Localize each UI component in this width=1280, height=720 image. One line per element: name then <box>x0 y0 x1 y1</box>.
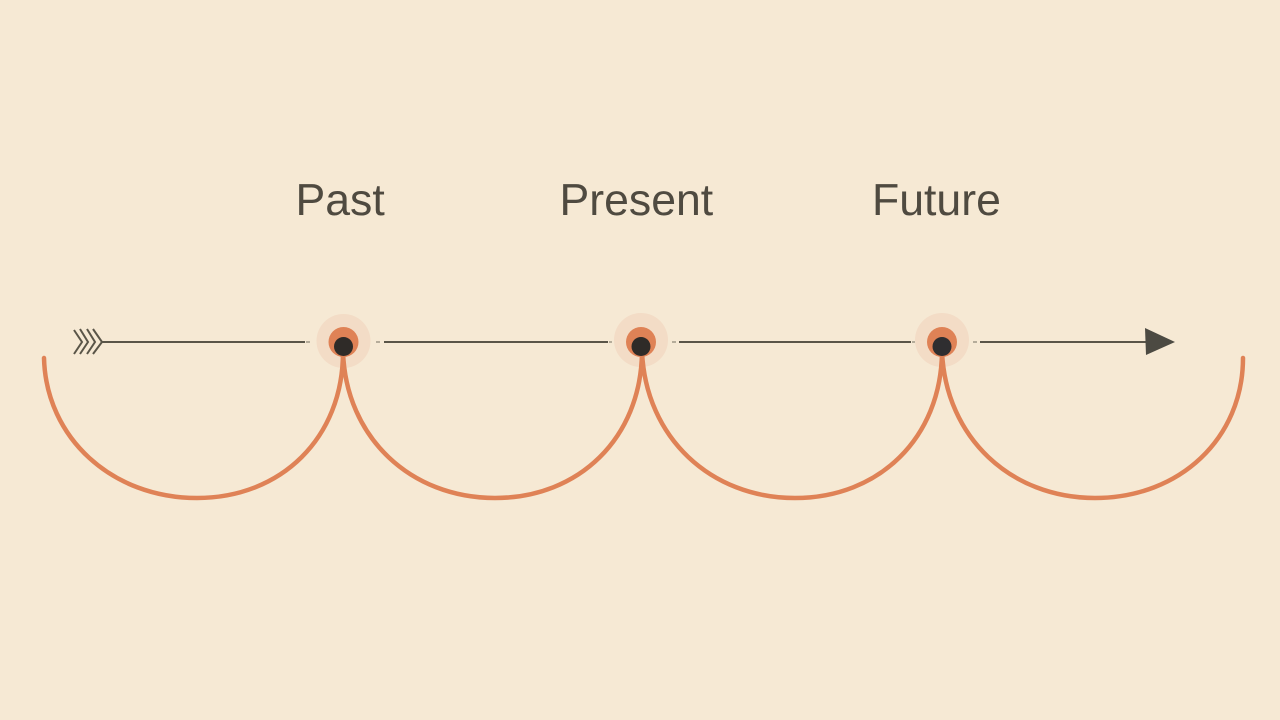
arc 2 <box>343 352 642 498</box>
arc 4 <box>942 352 1243 498</box>
arc 3 <box>642 352 942 498</box>
icon: arrowhead <box>1145 328 1175 355</box>
timeline axis with arrow <box>74 328 1175 355</box>
halo: present <box>614 313 668 367</box>
dot: present <box>632 337 650 356</box>
halo: future <box>915 313 969 367</box>
axis segment: past to present <box>384 341 608 343</box>
node dots <box>334 337 952 356</box>
axis segment: present to future <box>679 341 911 343</box>
axis segment: future onward <box>980 341 1146 343</box>
icon: fletching arrow tail <box>74 329 102 354</box>
axis segment: past start <box>102 341 305 343</box>
label: Past: Past <box>296 176 385 225</box>
arc 1 <box>44 352 343 498</box>
label: Future: Future <box>872 176 1001 225</box>
label: Present: Present <box>560 176 714 225</box>
node halos <box>316 313 969 368</box>
halo: past <box>316 314 370 368</box>
orange scallop arcs <box>44 352 1243 498</box>
dot: past <box>334 337 353 356</box>
dot: future <box>932 337 952 356</box>
small axis ticks beside the nodes <box>306 341 977 343</box>
